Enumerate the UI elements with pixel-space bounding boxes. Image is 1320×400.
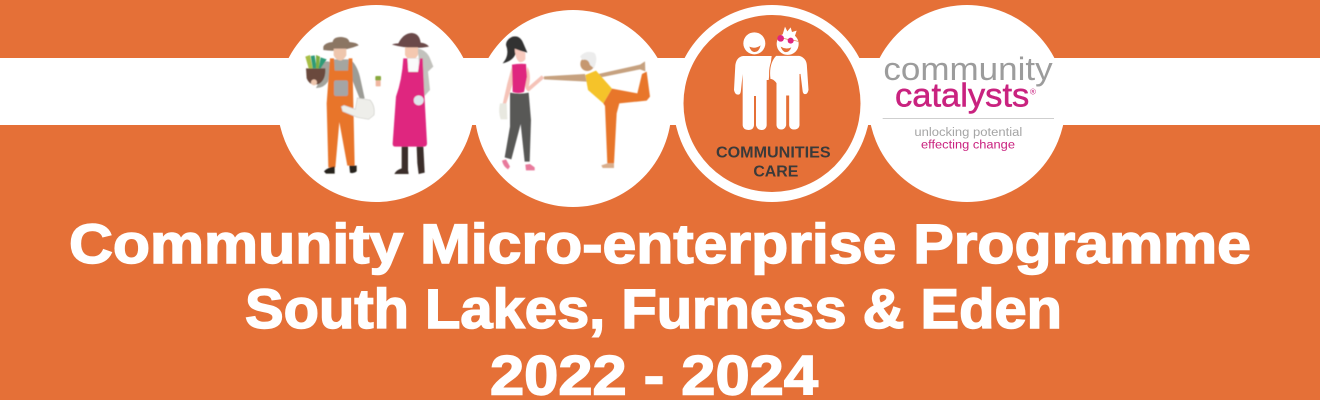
logo label — [716, 144, 831, 181]
icon: gardener in magenta apron — [392, 33, 433, 174]
title: South Lakes, Furness & Eden — [245, 277, 1062, 340]
logo wordmark: community — [883, 50, 1053, 87]
logo wordmark: ® — [1030, 88, 1036, 97]
icon: woman with bag — [499, 36, 544, 170]
icon: gardener in orange overalls — [305, 37, 374, 174]
icon: two smiling figures — [734, 27, 809, 130]
circle: gardeners — [278, 5, 474, 202]
circle: Communities Care logo — [674, 5, 870, 202]
logo strapline — [914, 125, 1022, 151]
circle: Community Catalysts logo — [868, 5, 1066, 202]
icon: yoga pose figure — [544, 52, 650, 168]
logo wordmark — [883, 50, 1053, 115]
logo label: CARE — [753, 164, 798, 181]
title — [69, 212, 1251, 400]
white band — [0, 58, 1320, 125]
title: Community Micro-enterprise Programme — [69, 212, 1251, 275]
logo label: COMMUNITIES — [716, 144, 831, 161]
circle: yoga pair — [474, 10, 672, 207]
logo strapline: unlocking potential — [914, 125, 1022, 139]
logo wordmark: catalysts — [895, 78, 1029, 115]
logo strapline: effecting change — [921, 137, 1015, 151]
icon: small potted plant — [375, 76, 381, 86]
